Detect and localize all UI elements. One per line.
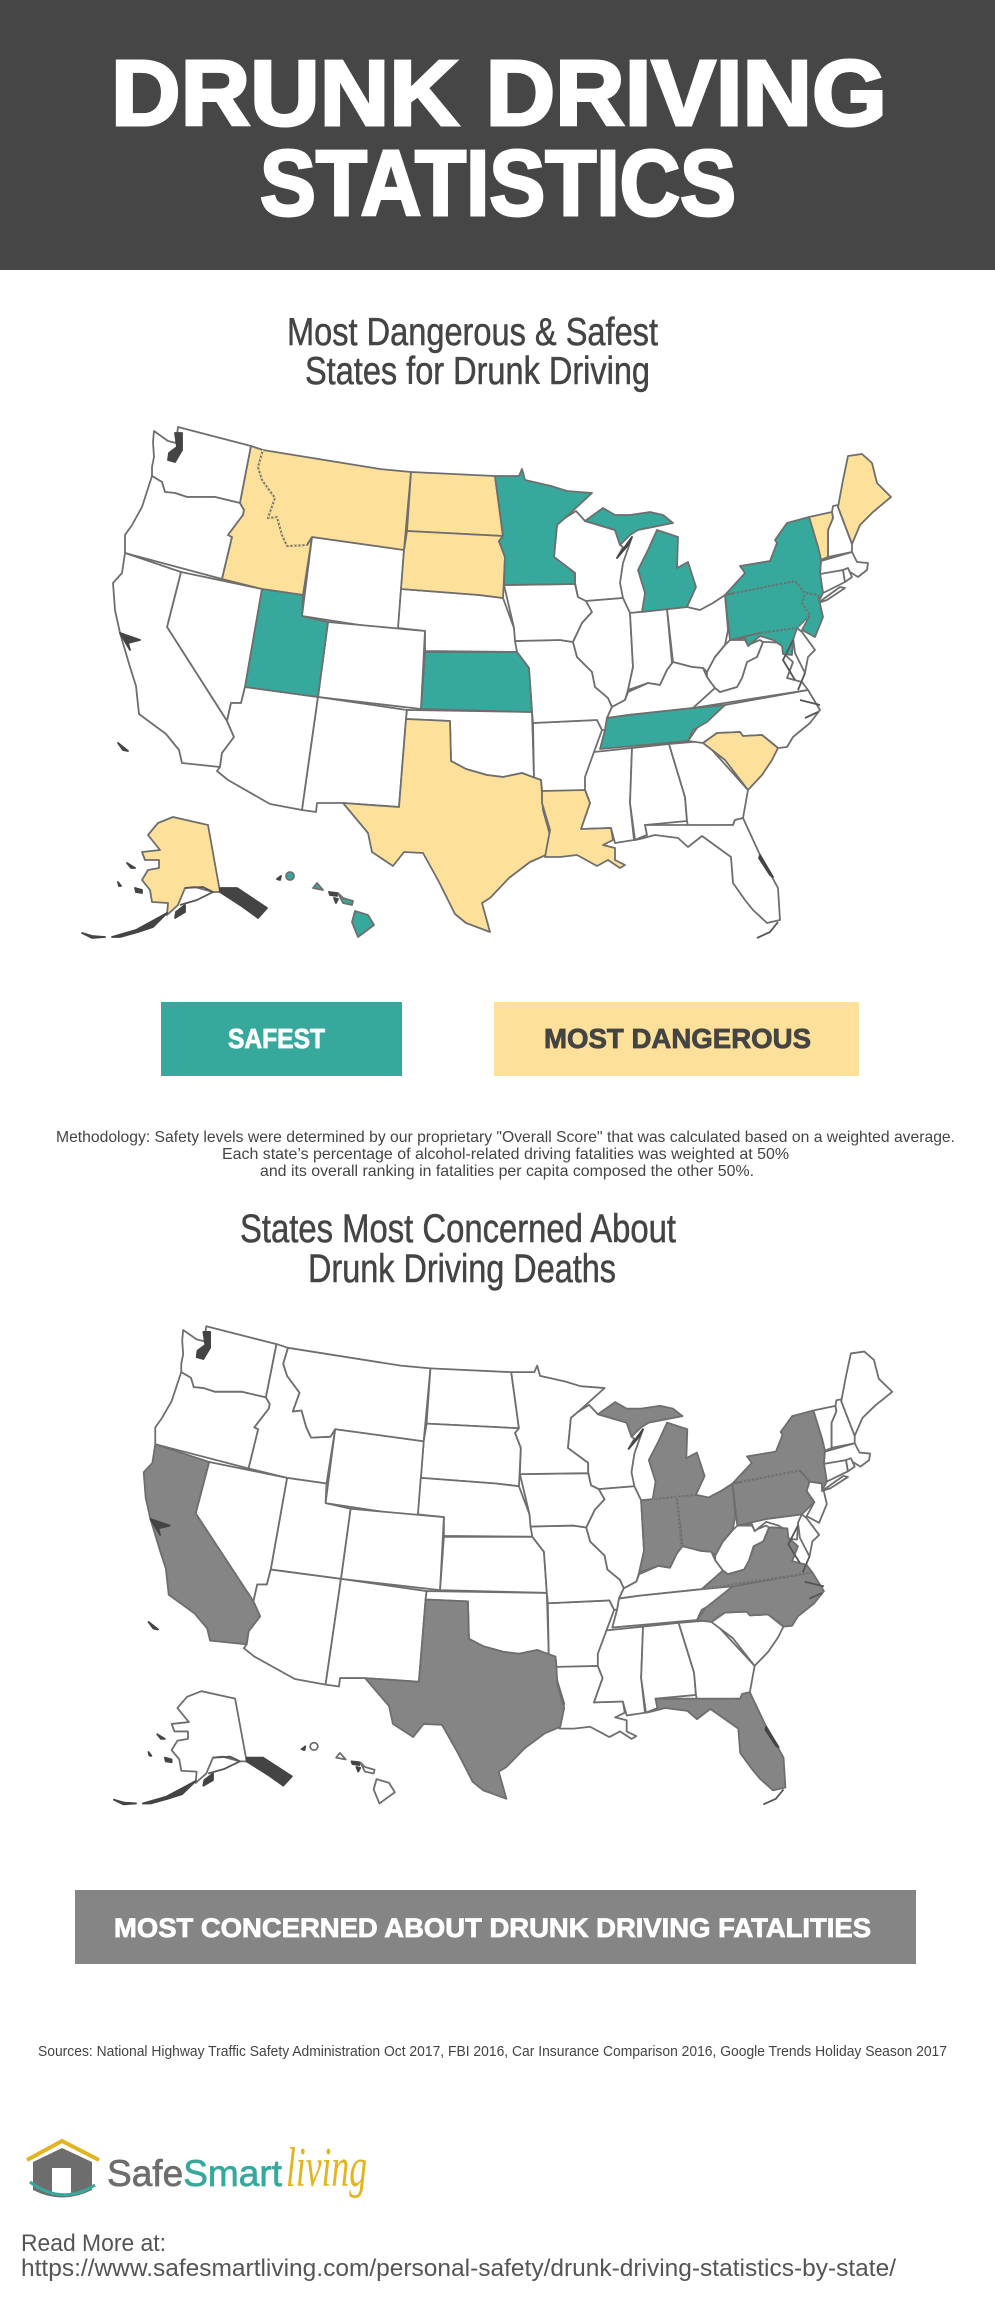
state: Pennsylvania	[733, 1470, 814, 1526]
legend: most dangerous	[494, 1002, 859, 1076]
state: Vermont	[809, 512, 833, 560]
state: Montana	[258, 450, 411, 550]
state: Indiana	[628, 609, 672, 690]
state: Oklahoma	[426, 1591, 549, 1655]
state: Connecticut	[824, 1460, 848, 1482]
state: Oregon	[155, 1372, 270, 1469]
state: California	[144, 1444, 260, 1644]
heading: most dangerous and safest	[287, 311, 658, 393]
state: Maine	[838, 454, 891, 544]
state: Texas	[365, 1599, 564, 1799]
state: Missouri	[530, 1526, 624, 1610]
methodology text: and its overall ranking in fatalities per capita composed the other 50%.	[260, 1163, 754, 1180]
map: states most concerned	[114, 1326, 892, 1804]
state: Michigan upper	[598, 1402, 682, 1437]
legend: safest	[161, 1002, 402, 1076]
islands of Hawaii	[302, 1743, 395, 1803]
state: New Mexico	[302, 697, 407, 812]
state: North Carolina	[688, 690, 820, 748]
state: Connecticut	[820, 570, 845, 593]
state: North Carolina	[697, 1572, 824, 1627]
heading: most dangerous and safest: Most Dangerous & Safest	[287, 311, 658, 354]
heading: states most concerned	[240, 1207, 676, 1291]
state: Arizona	[244, 1570, 341, 1685]
logo: SafeSmart living	[27, 2137, 367, 2199]
state: Rhode Island	[843, 568, 852, 582]
state: Wisconsin	[568, 1405, 643, 1489]
logo: SafeSmart living: SafeSmart	[107, 2153, 283, 2194]
state: New Hampshire	[828, 505, 852, 557]
state: Iowa	[504, 584, 592, 642]
state: Tennessee	[612, 1586, 733, 1628]
state: Nebraska	[398, 589, 517, 652]
state: South Dakota	[401, 531, 505, 598]
state: Delaware and eastern shore	[793, 628, 815, 673]
state: New York	[725, 517, 823, 603]
state: Georgia	[669, 741, 748, 826]
logo: SafeSmart living: living	[286, 2137, 367, 2199]
sources text: Sources: National Highway Traffic Safety Administration Oct 2017, FBI 2016, Car Insurance Comparison 2016, Google Trends Holiday Season 2017	[38, 2043, 947, 2060]
state: Missouri	[515, 640, 612, 730]
state: Pennsylvania	[725, 581, 810, 640]
state: Mississippi	[594, 1627, 645, 1716]
state: Wyoming	[302, 537, 404, 631]
read more text: Read More at:	[21, 2230, 166, 2257]
heading: states most concerned: Drunk Driving Deaths	[308, 1247, 616, 1291]
map: safest and most dangerous states	[82, 427, 891, 938]
read more text	[21, 2230, 896, 2282]
state: Idaho	[249, 1344, 335, 1483]
state: Tennessee	[600, 705, 725, 749]
state: Ohio	[677, 1483, 735, 1556]
state: California	[113, 553, 234, 767]
state: Minnesota	[495, 469, 592, 585]
state: Iowa	[520, 1473, 605, 1527]
state: Massachusetts	[820, 552, 868, 577]
legend: most concerned: MOST CONCERNED ABOUT DRUNK DRIVING FATALITIES	[114, 1913, 871, 1943]
islands of Hawaii	[277, 872, 374, 937]
state: Alabama	[630, 744, 687, 840]
state: Louisiana	[542, 790, 625, 868]
state: Virginia	[693, 642, 808, 708]
legend: most dangerous: MOST DANGEROUS	[544, 1023, 811, 1054]
Alaska panhandle and coastal details	[114, 1332, 824, 1804]
state: Texas	[343, 719, 550, 932]
state: Kansas	[421, 652, 532, 712]
state: New Jersey	[802, 593, 823, 637]
dotted borders between same-colour states	[258, 450, 818, 633]
state: Washington	[181, 1326, 276, 1397]
read more text: https://www.safesmartliving.com/personal-safety/drunk-driving-statistics-by-state/	[21, 2255, 896, 2282]
state: Long Island	[822, 1476, 848, 1491]
state: Arkansas	[533, 720, 602, 791]
state: Colorado	[341, 1509, 444, 1590]
state: Mississippi	[581, 748, 634, 843]
state: Florida	[646, 1692, 785, 1790]
state: Utah	[271, 1478, 351, 1579]
state: Rhode Island	[846, 1458, 855, 1471]
state: Kentucky	[619, 1546, 723, 1599]
state: Alabama	[641, 1623, 696, 1713]
state: South Carolina	[711, 1612, 784, 1666]
methodology text	[56, 1129, 955, 1180]
state: Long Island	[818, 587, 845, 603]
state: Florida	[635, 818, 780, 923]
state: Illinois	[573, 598, 633, 707]
state: Utah	[245, 589, 328, 697]
state: Nevada	[167, 572, 262, 721]
state: Wisconsin	[554, 511, 632, 601]
state: Alaska	[172, 1691, 247, 1783]
dotted borders between same-colour states	[653, 1470, 812, 1589]
state: Nebraska	[418, 1478, 532, 1537]
header banner: DRUNK DRIVING	[111, 41, 887, 145]
state: Michigan lower	[638, 530, 696, 612]
state: West Virginia	[715, 1526, 769, 1574]
legend: safest: SAFEST	[228, 1023, 325, 1054]
state: Wyoming	[326, 1429, 424, 1517]
state: Nevada	[196, 1462, 287, 1601]
header banner: STATISTICS	[260, 131, 736, 235]
state: North Dakota	[427, 1368, 519, 1428]
state: Massachusetts	[824, 1443, 870, 1467]
state: New York	[733, 1411, 827, 1491]
heading: states most concerned: States Most Concerned About	[240, 1207, 676, 1251]
state: New Mexico	[326, 1579, 427, 1687]
state: Vermont	[813, 1406, 836, 1451]
state: Washington	[152, 427, 251, 503]
legend: most concerned	[75, 1890, 916, 1964]
state: Indiana	[639, 1497, 682, 1572]
state: North Dakota	[407, 472, 503, 536]
state: New Hampshire	[832, 1399, 855, 1448]
state: Alaska	[142, 817, 220, 915]
state: Ohio	[667, 595, 728, 672]
state: Maryland	[730, 628, 797, 655]
state: South Dakota	[421, 1424, 521, 1486]
heading: most dangerous and safest: States for Drunk Driving	[305, 350, 650, 393]
state: Minnesota	[511, 1366, 605, 1474]
state: Kansas	[440, 1537, 547, 1593]
state: West Virginia	[707, 640, 763, 692]
state: Colorado	[318, 622, 425, 709]
state: Illinois	[586, 1486, 644, 1588]
Alaska panhandle and coastal details	[82, 433, 820, 938]
state: Montana	[283, 1348, 430, 1441]
header banner	[0, 0, 995, 270]
methodology text: Each state’s percentage of alcohol-related driving fatalities was weighted at 50%	[222, 1146, 789, 1163]
state: Kentucky	[607, 662, 715, 718]
state: Arizona	[217, 687, 318, 810]
state: Delaware and eastern shore	[798, 1514, 819, 1556]
state: Virginia	[702, 1527, 812, 1589]
state: Michigan upper	[585, 508, 673, 545]
icon: house	[27, 2141, 99, 2198]
state: Maryland	[737, 1514, 802, 1540]
state: Arkansas	[548, 1600, 614, 1667]
state: Oregon	[125, 476, 244, 579]
state: New Jersey	[807, 1482, 827, 1523]
methodology text: Methodology: Safety levels were determined by our proprietary "Overall Score" that was calculated based on a weighted average.	[56, 1129, 955, 1146]
state: Louisiana	[556, 1666, 636, 1739]
state: Michigan lower	[649, 1423, 705, 1499]
state: South Carolina	[703, 732, 778, 790]
state: Georgia	[679, 1620, 755, 1700]
state: Idaho	[222, 446, 312, 595]
state: Oklahoma	[406, 710, 534, 778]
state: Maine	[841, 1352, 892, 1436]
